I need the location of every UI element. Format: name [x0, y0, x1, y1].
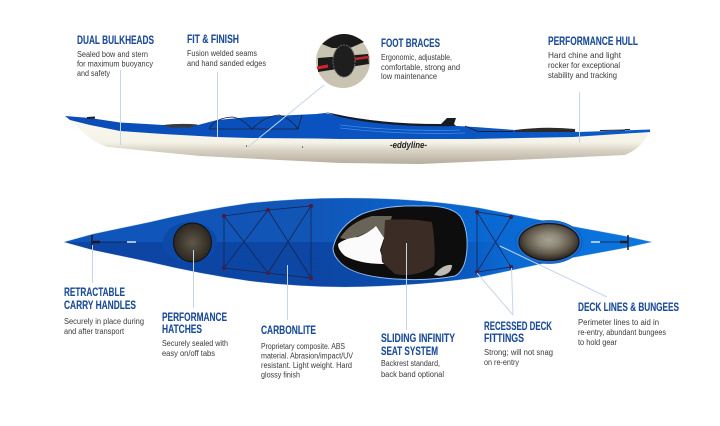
front deck lines [224, 206, 311, 278]
label: fit and finish: and hand sanded edges [187, 59, 266, 68]
hull rivets [246, 146, 303, 147]
label: carbonlite: Proprietary composite. ABS [261, 342, 345, 351]
label: deck lines and bungees: DECK LINES & BUNGEES [578, 302, 679, 314]
rear carry handle [591, 235, 628, 250]
label: retractable carry handles: and after transport [64, 327, 125, 336]
label: performance hatches: Securely sealed with [162, 339, 228, 348]
label: sliding infinity seat system: back band optional [381, 370, 444, 379]
cockpit white floor [338, 226, 384, 264]
front carry handle [92, 235, 136, 249]
label: dual bulkheads: Sealed bow and stern [77, 50, 148, 59]
label: performance hatches: HATCHES [162, 324, 202, 336]
side hull [66, 116, 650, 164]
label: carbonlite: CARBONLITE [261, 325, 316, 337]
label: dual bulkheads: DUAL BULKHEADS [77, 35, 154, 47]
label: performance hatches [162, 312, 228, 358]
label: retractable carry handles: RETRACTABLE [64, 287, 125, 299]
label: retractable carry handles: Securely in place during [64, 317, 144, 326]
label: recessed deck fittings: on re-entry [484, 358, 519, 367]
label: deck lines and bungees [578, 302, 679, 347]
label: foot braces: comfortable, strong and [381, 63, 460, 72]
label: sliding infinity seat system: Backrest standard, [381, 359, 440, 368]
label: carbonlite [261, 325, 354, 380]
top view kayak [64, 198, 652, 287]
label: recessed deck fittings: FITTINGS [484, 333, 524, 345]
label: fit and finish: Fusion welded seams [187, 49, 257, 58]
rear hatch [516, 220, 582, 264]
cockpit [333, 206, 467, 280]
side view kayak [65, 112, 650, 164]
label: performance hull: rocker for exceptional [548, 61, 620, 70]
label: foot braces: Ergonomic, adjustable, [381, 53, 452, 62]
label: recessed deck fittings: RECESSED DECK [484, 321, 552, 333]
side bungees [209, 115, 302, 129]
label: performance hull: PERFORMANCE HULL [548, 36, 638, 48]
side front hatch [163, 124, 198, 128]
side deck [65, 113, 650, 139]
label: foot braces: FOOT BRACES [381, 38, 440, 50]
label: dual bulkheads: for maximum buoyancy [77, 60, 153, 68]
label: dual bulkheads: and safety [77, 69, 110, 78]
label: carbonlite: glossy finish [261, 370, 300, 380]
label: sliding infinity seat system [381, 333, 455, 379]
seat [381, 219, 435, 275]
label: sliding infinity seat system: SLIDING INFINITY [381, 333, 455, 345]
label: carbonlite: material. Abrasion/impact/UV [261, 352, 354, 360]
brand logo: -eddyline- [390, 140, 427, 150]
label: retractable carry handles: CARRY HANDLES [64, 300, 136, 312]
cockpit grey floor [340, 216, 392, 240]
label: performance hull [548, 36, 638, 80]
label: performance hull: stability and tracking [548, 71, 617, 80]
side rear deck line [465, 126, 513, 132]
foot brace detail [316, 34, 370, 88]
top hull [64, 198, 652, 287]
label: deck lines and bungees: re-entry, abundant bungees [578, 328, 666, 337]
side handle bow [87, 116, 95, 119]
label: sliding infinity seat system: SEAT SYSTEM [381, 346, 438, 358]
cockpit reflection [434, 265, 452, 276]
label: carbonlite: resistant. Light weight. Hard [261, 361, 352, 370]
label: retractable carry handles [64, 287, 144, 336]
side deck highlight [340, 125, 465, 133]
label: performance hull: Hard chine and light [548, 51, 622, 60]
label: deck lines and bungees: to hold gear [578, 338, 617, 347]
side cockpit coaming [325, 112, 456, 126]
label: deck lines and bungees: Perimeter lines to aid in [578, 318, 659, 327]
label: fit and finish: FIT & FINISH [187, 34, 239, 46]
front hatch [163, 222, 217, 263]
label: dual bulkheads [77, 35, 154, 78]
side handle stern [600, 130, 630, 131]
label: recessed deck fittings: Strong; will not snag [484, 348, 553, 357]
rear deck lines [477, 212, 511, 272]
leader lines [92, 70, 607, 330]
label: recessed deck fittings [484, 321, 553, 367]
label: fit and finish [187, 34, 266, 68]
label: foot braces [381, 38, 460, 81]
label: foot braces: low maintenance [381, 72, 438, 81]
label: performance hatches: easy on/off tabs [162, 349, 215, 358]
label: performance hatches: PERFORMANCE [162, 312, 227, 324]
top lower shade [64, 242, 652, 287]
side rear hatch [515, 128, 575, 132]
